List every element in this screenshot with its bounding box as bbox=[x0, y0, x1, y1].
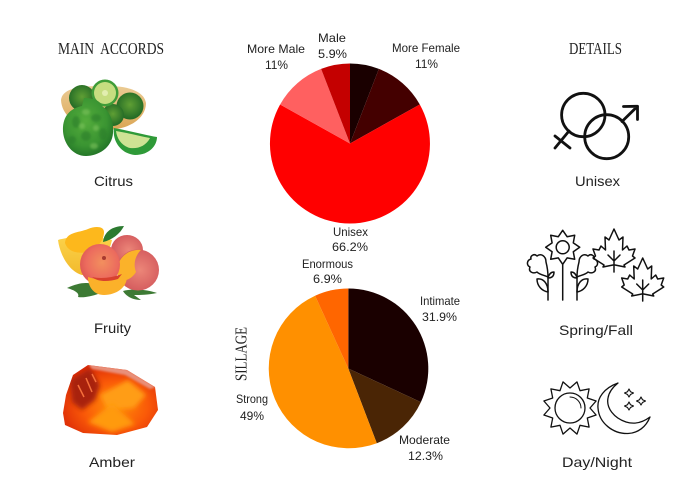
label: moderate: Moderate bbox=[399, 433, 450, 447]
label: unisex: Unisex bbox=[333, 225, 368, 239]
label: male: Male bbox=[318, 31, 346, 45]
label: intimate: Intimate bbox=[420, 294, 460, 308]
value: intimate: 31.9% bbox=[422, 310, 457, 324]
image: citrus bergamot basket bbox=[61, 80, 157, 156]
label: fruity: Fruity bbox=[94, 320, 131, 336]
value: strong: 49% bbox=[240, 409, 264, 423]
icon: stars bbox=[624, 389, 646, 410]
icon: sun bbox=[544, 382, 596, 434]
label: more female: More Female bbox=[392, 41, 460, 55]
image: peaches bbox=[58, 226, 159, 300]
icon: sunflower bbox=[546, 230, 580, 300]
icon: maple leaf upper bbox=[593, 229, 635, 272]
value: enormous: 6.9% bbox=[313, 272, 342, 286]
value: more female: 11% bbox=[415, 57, 438, 71]
label: amber: Amber bbox=[89, 454, 135, 470]
chart: sillage pie bbox=[236, 257, 460, 463]
icon: maple leaf lower bbox=[622, 258, 664, 301]
icon: flowers and maple leaves bbox=[527, 229, 664, 301]
icon: sun and moon bbox=[544, 382, 650, 434]
label: unisex detail: Unisex bbox=[575, 173, 620, 189]
value: male: 5.9% bbox=[318, 47, 347, 61]
label: day/night: Day/Night bbox=[562, 454, 632, 470]
icon: unisex symbol bbox=[555, 93, 638, 159]
label: enormous: Enormous bbox=[302, 257, 353, 271]
image: amber stone bbox=[63, 364, 158, 435]
heading: details: DETAILS bbox=[569, 39, 622, 58]
label: spring/fall: Spring/Fall bbox=[559, 322, 633, 338]
icon: crescent moon bbox=[598, 383, 650, 434]
heading: sillage: SILLAGE bbox=[232, 327, 250, 381]
chart: gender pie bbox=[247, 31, 460, 254]
value: moderate: 12.3% bbox=[408, 449, 443, 463]
heading: main accords: MAIN ACCORDS bbox=[58, 39, 164, 58]
label: more male: More Male bbox=[247, 42, 305, 56]
icon: left tulip bbox=[527, 255, 554, 300]
icon: right tulip bbox=[571, 255, 598, 300]
value: unisex: 66.2% bbox=[332, 240, 368, 254]
label: citrus: Citrus bbox=[94, 173, 133, 189]
value: more male: 11% bbox=[265, 58, 288, 72]
label: strong: Strong bbox=[236, 392, 268, 406]
